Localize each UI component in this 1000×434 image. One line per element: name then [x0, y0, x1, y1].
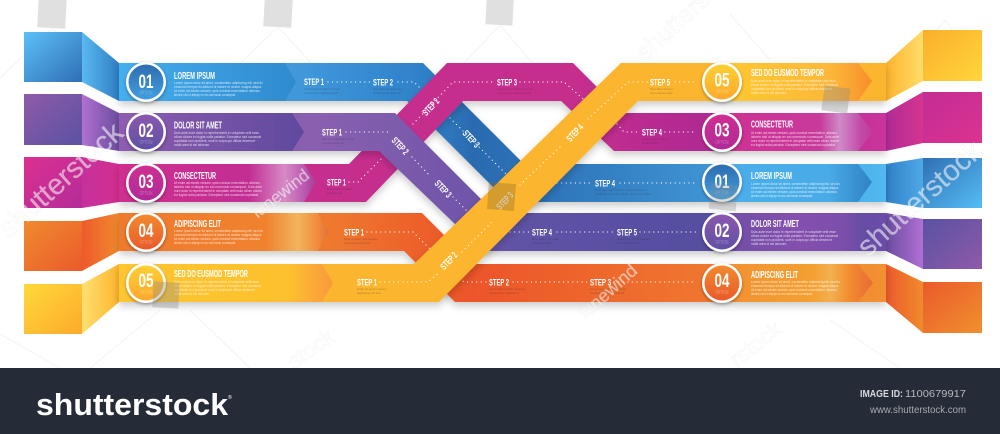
badge: left 05 [126, 263, 166, 303]
ribbon: orange: consectetur adipiscing [489, 291, 519, 295]
watermark overlays: stock [282, 323, 340, 374]
right text: dolor sit amet: cupidatat non proident, sunt in culpa qui officia deserunt [751, 238, 832, 242]
badge: right 04: OPTION [716, 290, 729, 296]
left text: sed do eusmod tempor: Duis aute irure dolor in reprehenderit in voluptate velit esse [174, 280, 259, 284]
right text: sed do eusmod tempor [751, 68, 838, 95]
ribbon: blue: STEP 4 [595, 178, 615, 190]
ribbon: magenta: Lorem ipsum dolor [327, 187, 352, 191]
footer logo: shutterstock [36, 387, 229, 422]
ribbon: orange: sed eiusmod tempor [344, 241, 371, 245]
left text: dolor sit amet: cupidatat non proident, sunt in culpa qui officia deserunt [174, 139, 255, 143]
badge: left 04: OPTION [140, 240, 153, 246]
ribbon: magenta: sit amet elit [642, 141, 657, 145]
right end block: magenta [886, 92, 982, 151]
badge: left 02: OPTION [140, 140, 153, 146]
ribbon: purple: Excepteur sint occaecat [617, 237, 649, 241]
left text: dolor sit amet: Duis aute irure dolor in reprehenderit in voluptate velit esse [174, 131, 259, 135]
right text: dolor sit amet [751, 219, 838, 246]
ribbon: magenta: STEP 3 [497, 78, 517, 88]
badge: right 02 [702, 212, 742, 252]
ribbon: magenta [119, 63, 886, 202]
ribbon: magenta: STEP 4 [642, 128, 662, 138]
ribbon: magenta: sit amet elit [327, 191, 342, 195]
badge: left 05: OPTION [140, 290, 153, 296]
right text: sed do eusmod tempor: Duis aute irure dolor in reprehenderit in voluptate velit esse [751, 79, 836, 83]
badge: right 03: 03 [714, 120, 730, 142]
ribbon: purple: STEP 2 [389, 135, 410, 157]
ribbon: yellow: STEP 3 [495, 190, 516, 212]
badge: right 03 [702, 112, 742, 152]
right end block: orange [886, 264, 982, 333]
left text: adipiscing elit: Ut enim ad minim veniam, quis nostrud exercitation ullamco [174, 237, 260, 241]
badge: left 04 [126, 212, 166, 252]
ribbon: blue: STEP 3 [460, 128, 481, 150]
ribbon: blue: consectetur adipiscing elit [304, 91, 339, 95]
right text: dolor sit amet: cillum dolore eu fugiat nulla pariatur. Excepteur sint occaecat [751, 234, 838, 238]
right text: consectetur: CONSECTETUR [751, 120, 793, 130]
left text: sed do eusmod tempor: SED DO EUSMOD TEMPOR [174, 269, 248, 280]
ribbon: blue: voluptate velit esse cillum dolore eu fugiat [595, 192, 651, 196]
ribbon: purple: velit esse cillum [532, 241, 554, 245]
left text: adipiscing elit: ADIPISCING ELIT [174, 219, 221, 230]
left text: consectetur: laboris nisi ut aliquip ex ea commodo consequat. Duis aute [174, 185, 262, 189]
right text: adipiscing elit: eiusmod tempor incididunt ut labore et dolore magna aliqua. [751, 284, 839, 288]
ribbon: blue: Nam liber tempor cum [373, 87, 403, 91]
right text: lorem ipsum [751, 171, 840, 198]
left text: sed do eusmod tempor [174, 269, 261, 296]
left text: adipiscing elit: laboris nisi ut aliquip ex ea commodo consequat. [174, 241, 236, 245]
right text: sed do eusmod tempor: mollit anim id est laborum. [751, 91, 787, 95]
right end block: yellow [886, 30, 982, 101]
ribbon: orange: consectetur adipiscing elit [590, 291, 625, 295]
badge: left 01: 01 [138, 71, 154, 93]
ribbon: orange: STEP 1 [344, 228, 364, 238]
left text: dolor sit amet: DOLOR SIT AMET [174, 120, 222, 132]
left text: dolor sit amet: cillum dolore eu fugiat nulla pariatur. Excepteur sint occaecat [174, 135, 261, 139]
ribbon: blue: Lorem ipsum dolor sit amet [304, 87, 340, 91]
right text: adipiscing elit: laboris nisi ut aliquip ex ea commodo consequat. [751, 292, 813, 296]
left text: consectetur [174, 171, 262, 197]
left text: lorem ipsum: eiusmod tempor incididunt ut labore et dolore magna aliqua. [174, 85, 262, 89]
left text: consectetur: irure dolor in reprehenderit in voluptate velit esse cillum dolore [174, 189, 262, 193]
ribbon: yellow: Dolor sit amet consect [357, 287, 387, 291]
ribbon: yellow: STEP 5 [650, 78, 670, 88]
footer image id [860, 388, 966, 416]
badge: left 02 [126, 112, 166, 152]
ribbon: yellow [119, 63, 886, 302]
left text: lorem ipsum: Ut enim ad minim veniam, quis nostrud exercitation ullamco [174, 89, 260, 93]
ribbon: purple [119, 113, 886, 251]
right text: consectetur: eu fugiat nulla pariatur. Excepteur sint occaecat cupidatat [751, 143, 835, 147]
left text: consectetur: eu fugiat nulla pariatur. Excepteur sint occaecat cupidatat [174, 193, 258, 197]
right text: lorem ipsum: Lorem ipsum dolor sit amet, consectetur adipiscing elit, sed do [751, 182, 840, 186]
badge: right 01: OPTION [716, 190, 729, 196]
ribbon: magenta: consectetur adipiscing elit [497, 91, 532, 95]
ribbon: magenta: STEP 2 [421, 96, 442, 118]
ribbon: blue: Duis aute irure dolor in reprehenderit in [595, 188, 647, 192]
left text: lorem ipsum: LOREM IPSUM [174, 71, 215, 82]
ribbon: orange: STEP 3 [590, 278, 611, 288]
ribbon: yellow: STEP 1 [357, 278, 377, 288]
left text: adipiscing elit: Lorem ipsum dolor sit amet, consectetur adipiscing elit, sed do [174, 229, 263, 233]
ribbon: yellow: STEP 2 [439, 250, 460, 272]
badge: right 02: OPTION [716, 240, 729, 246]
left text: lorem ipsum: Lorem ipsum dolor sit amet, consectetur adipiscing elit, sed do [174, 81, 263, 85]
watermark overlays: shutterstock [851, 134, 989, 263]
badge: left 05: 05 [138, 270, 154, 292]
ribbon: purple: STEP 5 [617, 228, 637, 238]
left text: dolor sit amet: mollit anim id est laborum. [174, 143, 210, 147]
ribbon: blue: soluta nobis eleifend [373, 91, 401, 95]
left end block: magenta [24, 157, 119, 208]
left text: consectetur: CONSECTETUR [174, 171, 216, 182]
right text: adipiscing elit: Lorem ipsum dolor sit amet, consectetur adipiscing elit, sed do [751, 280, 840, 284]
ribbon: orange: Lorem ipsum dolor sit amet [489, 287, 525, 291]
right text: consectetur: Ut enim ad minim veniam, quis nostrud exercitation ullamco [751, 131, 837, 135]
badge: left 04: 04 [138, 220, 154, 242]
ribbon: magenta: Lorem ipsum dolor [642, 137, 667, 141]
right text: lorem ipsum: laboris nisi ut aliquip ex ea commodo consequat. [751, 194, 813, 198]
right text: lorem ipsum: eiusmod tempor incididunt ut labore et dolore magna aliqua. [751, 186, 839, 190]
left text: lorem ipsum [174, 71, 263, 97]
ribbon: yellow: Nam liber tempor [650, 87, 673, 91]
ribbon: purple: Duis aute irure dolor [532, 237, 559, 241]
ribbon: purple: Sed ut perspiciatis unde [322, 137, 354, 141]
right text: dolor sit amet: DOLOR SIT AMET [751, 219, 799, 230]
ribbon: purple: STEP 3 [432, 178, 453, 200]
badge: left 03: OPTION [140, 191, 153, 197]
badge: right 05: 05 [714, 70, 730, 92]
left end block: orange [24, 213, 119, 271]
ribbon: purple: STEP 1 [322, 128, 342, 138]
footer image id: www.shutterstock.com [869, 405, 966, 416]
ribbon: yellow: STEP 4 [565, 122, 586, 144]
badge: right 04 [702, 263, 742, 303]
right text: lorem ipsum: LOREM IPSUM [751, 171, 792, 182]
ribbon: blue [119, 63, 886, 202]
right text: dolor sit amet: mollit anim id est laborum. [751, 242, 787, 246]
right end block: purple [886, 213, 982, 269]
ribbon: magenta: STEP 1 [327, 178, 346, 188]
badge: right 05: OPTION [716, 90, 729, 96]
left text: consectetur: Ut enim ad minim veniam, quis nostrud exercitation ullamco [174, 181, 260, 185]
badge: right 05 [702, 62, 742, 102]
left text: sed do eusmod tempor: cillum dolore eu fugiat nulla pariatur. Excepteur sint occaecat [174, 284, 261, 288]
right text: adipiscing elit [751, 270, 840, 296]
watermark overlays: iunewind [248, 166, 313, 222]
right text: sed do eusmod tempor: cillum dolore eu fugiat nulla pariatur. Excepteur sint occaecat [751, 83, 838, 87]
left end block: blue [24, 32, 119, 101]
right text: sed do eusmod tempor: SED DO EUSMOD TEMPOR [751, 68, 824, 79]
badge: right 03: OPTION [716, 140, 729, 146]
ribbon: purple: non proident sunt [617, 241, 640, 245]
watermark overlays: iunewind [575, 260, 641, 323]
right text: consectetur [751, 120, 839, 147]
left text: dolor sit amet [174, 120, 261, 147]
ribbon: orange: Duis ut amet, consectetur [344, 237, 378, 241]
left end block: purple [24, 94, 119, 151]
right text: adipiscing elit: ADIPISCING ELIT [751, 270, 798, 281]
right text: lorem ipsum: Ut enim ad minim veniam, quis nostrud exercitation ullamco [751, 190, 837, 194]
badge: right 01: 01 [714, 171, 730, 193]
badge: right 02: 02 [714, 220, 730, 242]
badge: left 03 [126, 163, 166, 203]
ribbon: orange [119, 213, 886, 302]
ribbon: orange: STEP 2 [489, 278, 509, 288]
watermark marks along top edge [37, 0, 514, 29]
ribbon: blue: STEP 2 [373, 78, 393, 88]
footer image id: IMAGE ID: [860, 388, 903, 400]
ribbon: purple: in rebus dolor at [322, 141, 344, 145]
left text: adipiscing elit: eiusmod tempor incididunt ut labore et dolore magna aliqua. [174, 233, 262, 237]
left end block: yellow [24, 264, 119, 334]
footer image id: 1100679917 [905, 388, 966, 400]
ribbon: blue: STEP 1 [304, 77, 324, 88]
badge: left 01 [126, 62, 166, 102]
ribbon: orange: Lorem ipsum dolor sit amet [590, 287, 626, 291]
right text: consectetur: irure dolor in reprehenderit in voluptate velit esse cillum dolore [751, 139, 839, 143]
badge: right 01 [702, 162, 742, 202]
left text: lorem ipsum: laboris nisi ut aliquip ex ea commodo consequat. [174, 93, 236, 97]
ribbon: yellow: adipiscing elit sed [357, 291, 381, 295]
right text: dolor sit amet: Duis aute irure dolor in reprehenderit in voluptate velit esse [751, 230, 836, 234]
watermark overlays: rstock [725, 316, 787, 372]
right end block: blue [886, 158, 982, 208]
ribbon: magenta: Lorem ipsum dolor sit amet [497, 87, 533, 91]
badge: left 01: OPTION [140, 90, 153, 96]
left text: adipiscing elit [174, 219, 263, 245]
badge: left 02: 02 [138, 120, 154, 142]
left text: sed do eusmod tempor: mollit anim id est laborum. [174, 292, 210, 296]
footer logo: ® [228, 394, 232, 401]
right text: adipiscing elit: Ut enim ad minim veniam, quis nostrud exercitation ullamco [751, 288, 837, 292]
badge: left 03: 03 [138, 171, 154, 193]
ribbon: purple: STEP 4 [532, 228, 552, 238]
left text: sed do eusmod tempor: cupidatat non proident, sunt in culpa qui officia deserunt [174, 288, 255, 292]
footer bar [0, 368, 1000, 434]
right text: consectetur: laboris nisi ut aliquip ex ea commodo consequat. Duis aute [751, 135, 839, 139]
right text: sed do eusmod tempor: cupidatat non proident, sunt in culpa qui officia deserunt [751, 87, 832, 91]
badge: right 04: 04 [714, 270, 730, 292]
ribbon: yellow: cum soluta nobis [650, 91, 673, 95]
